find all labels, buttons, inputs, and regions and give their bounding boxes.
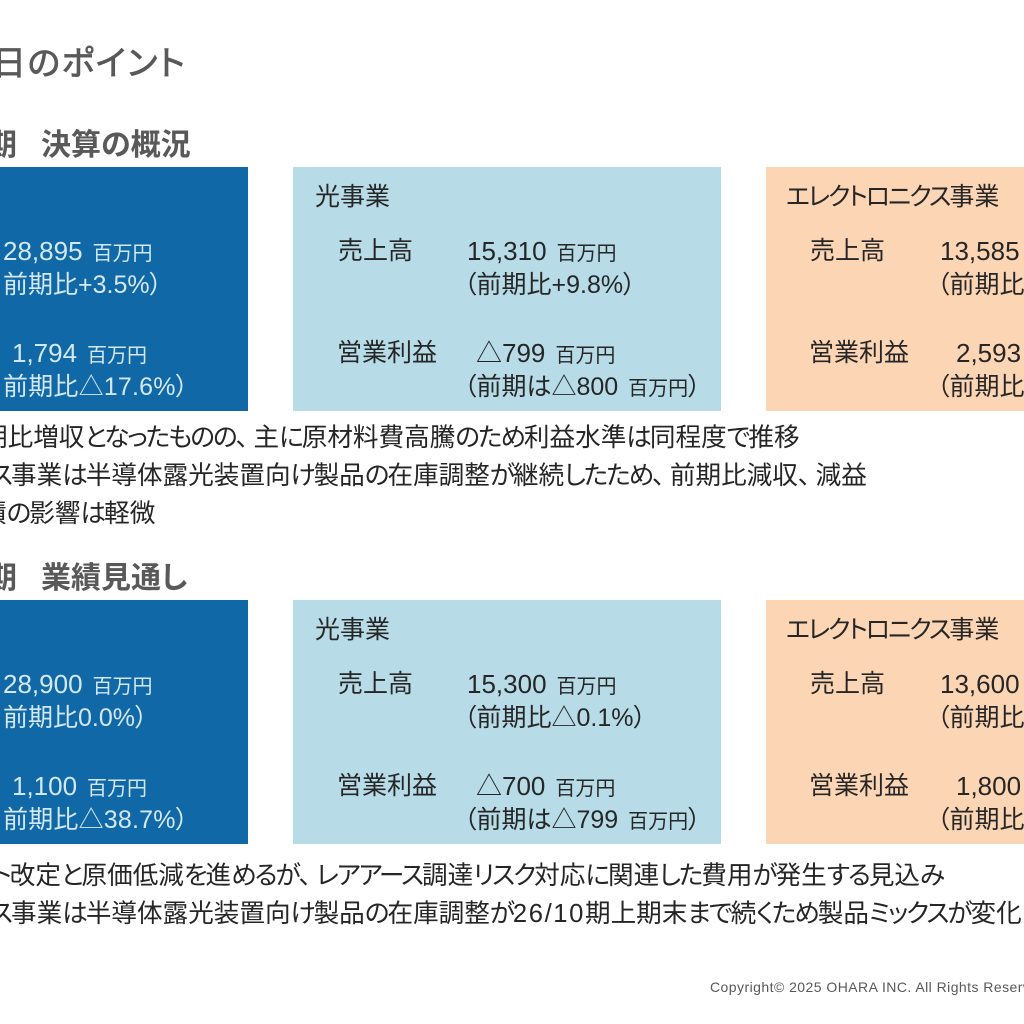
operating profit change: 前期比△17.6%） bbox=[3, 373, 188, 401]
panel: total results bbox=[0, 167, 248, 411]
bullet text: results line 2: ス事業は半導体露光装置向け製品の在庫調整が継続したため、前期比減収、減益 bbox=[0, 462, 867, 490]
net sales value: 15,300 百万円 bbox=[467, 669, 616, 699]
net sales change: 前期比0.0%） bbox=[3, 704, 147, 732]
operating profit comparison: （前期は△799 百万円） bbox=[464, 806, 701, 834]
net sales change: （前期比+9.8%） bbox=[464, 271, 636, 299]
operating profit label: 営業利益 bbox=[809, 772, 909, 800]
segment name: エレクトロニクス事業 bbox=[786, 183, 999, 211]
net sales value: 13,600 bbox=[940, 669, 1020, 699]
net sales label: 売上高 bbox=[810, 670, 885, 698]
bullet text: forecast line 2: ス事業は半導体露光装置向け製品の在庫調整が26/10期上期末まで続くため製品ミックスが変化 bbox=[0, 900, 1022, 928]
operating profit label: 営業利益 bbox=[809, 339, 909, 367]
operating profit change: 前期比△38.7%） bbox=[3, 806, 188, 834]
net sales value: 28,900 百万円 bbox=[3, 669, 152, 699]
segment name: 光事業 bbox=[315, 616, 390, 644]
operating profit change: （前期比 bbox=[937, 806, 1024, 834]
operating profit value: 1,800 bbox=[956, 771, 1021, 801]
operating profit value: △700 百万円 bbox=[476, 771, 615, 801]
operating profit value: △799 百万円 bbox=[476, 338, 615, 368]
net sales value: 28,895 百万円 bbox=[3, 236, 152, 266]
net sales change: （前期比△0.1%） bbox=[464, 704, 646, 732]
operating profit label: 営業利益 bbox=[337, 339, 437, 367]
panel: total forecast bbox=[0, 600, 248, 844]
net sales change: （前期比 bbox=[937, 704, 1024, 732]
operating profit value: 1,100 百万円 bbox=[12, 771, 147, 801]
net sales label: 売上高 bbox=[810, 237, 885, 265]
operating profit comparison: （前期は△800 百万円） bbox=[464, 373, 701, 401]
panel: electronics business results bbox=[766, 167, 1024, 411]
net sales change: （前期比 bbox=[937, 271, 1024, 299]
operating profit change: （前期比 bbox=[937, 373, 1024, 401]
bullet text: forecast line 1: ト改定と原価低減を進めるが、レアアース調達リスク対応に関連した費用が発生する見込み bbox=[0, 862, 943, 890]
segment name: 光事業 bbox=[315, 183, 390, 211]
panel: optical business results bbox=[293, 167, 721, 411]
net sales value: 15,310 百万円 bbox=[467, 236, 616, 266]
operating profit value: 1,794 百万円 bbox=[12, 338, 147, 368]
panel: electronics business forecast bbox=[766, 600, 1024, 844]
bullet text: results line 1: 期比増収となったものの、主に原材料費高騰のため利益水準は同程度で推移 bbox=[0, 424, 800, 452]
net sales change: 前期比+3.5%） bbox=[3, 271, 162, 299]
net sales value: 13,585 bbox=[940, 236, 1020, 266]
net sales label: 売上高 bbox=[338, 670, 413, 698]
panel: optical business forecast bbox=[293, 600, 721, 844]
operating profit label: 営業利益 bbox=[337, 772, 437, 800]
operating profit value: 2,593 bbox=[956, 338, 1021, 368]
net sales label: 売上高 bbox=[338, 237, 413, 265]
segment name: エレクトロニクス事業 bbox=[786, 616, 999, 644]
